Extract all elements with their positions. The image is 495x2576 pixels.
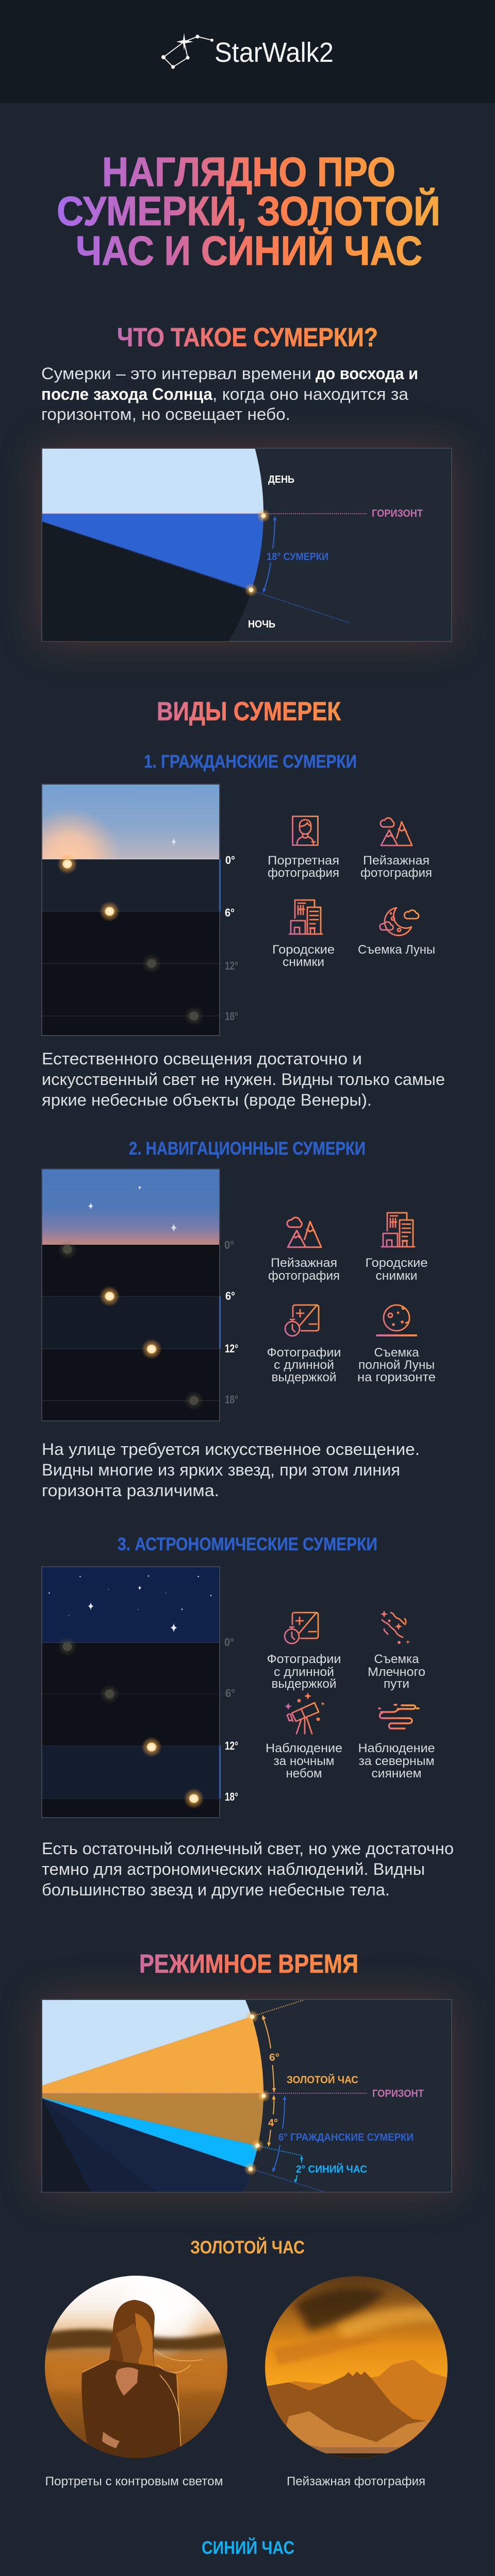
day area bbox=[42, 449, 263, 514]
label: landscape photo bbox=[268, 1256, 340, 1283]
arrow: civil twilight bbox=[272, 2095, 287, 2173]
label: long exposure: с длинной bbox=[274, 1665, 334, 1679]
label: night: НОЧЬ bbox=[248, 619, 275, 630]
title bbox=[57, 149, 440, 274]
panel: astronomical twilight sky scale bbox=[42, 1567, 238, 1818]
wordmark: StarWalk2 bbox=[214, 37, 334, 68]
text block: nautical twilight: Видны многие из ярких звезд, при этом линия bbox=[42, 1461, 400, 1479]
label: moon shots: Съемка Луны bbox=[358, 943, 435, 957]
label: landscape photo: фотография bbox=[360, 866, 432, 880]
label: milky way: Съемка bbox=[374, 1652, 419, 1666]
label: night sky: Наблюдение bbox=[266, 1741, 342, 1755]
icon: city bbox=[289, 900, 322, 934]
panel: nautical twilight sky scale bbox=[42, 1169, 238, 1421]
label: civil twilight: 6° ГРАЖДАНСКИЕ СУМЕРКИ bbox=[278, 2132, 414, 2143]
heading: mode time: РЕЖИМНОЕ ВРЕМЯ bbox=[139, 1949, 358, 1978]
label: day: ДЕНЬ bbox=[268, 474, 294, 485]
label: portrait photo: Портретная bbox=[268, 854, 339, 868]
text block: astronomical twilight: темно для астрономических наблюдений. Видны bbox=[42, 1860, 425, 1878]
label: city shots bbox=[272, 943, 335, 969]
label: long exposure bbox=[267, 1346, 341, 1384]
text block: nautical twilight: горизонта различима. bbox=[42, 1481, 219, 1500]
title: НАГЛЯДНО ПРО bbox=[102, 149, 395, 195]
logo: StarWalk2 bbox=[161, 33, 334, 69]
label: aurora: сиянием bbox=[371, 1767, 422, 1781]
label: long exposure: выдержкой bbox=[271, 1677, 336, 1691]
active scale marker bbox=[219, 1296, 221, 1349]
sun path bbox=[57, 854, 204, 1026]
active scale marker bbox=[219, 859, 221, 911]
active band bbox=[42, 1745, 219, 1799]
text block: twilight definition bbox=[41, 364, 418, 423]
text block: nautical twilight bbox=[42, 1440, 420, 1500]
degree labels: 0° bbox=[224, 1636, 234, 1649]
text block: twilight definition: горизонтом, но освещает небо. bbox=[41, 405, 290, 423]
label: night sky bbox=[266, 1741, 342, 1781]
label: long exposure: Фотографии bbox=[267, 1652, 341, 1666]
label: milky way bbox=[368, 1652, 425, 1691]
uses: civil twilight bbox=[268, 816, 435, 969]
degree labels: 12° bbox=[225, 959, 238, 972]
heading: types of twilight: ВИДЫ СУМЕРЕК bbox=[157, 697, 341, 726]
degree labels: 18° bbox=[225, 1790, 238, 1803]
stars bbox=[88, 1185, 177, 1232]
label: landscape photo: Пейзажная bbox=[271, 1256, 337, 1270]
icon: constellation bbox=[161, 33, 213, 69]
text block: astronomical twilight: большинство звезд и другие небесные тела. bbox=[42, 1880, 390, 1899]
label: blue hour: 2° СИНИЙ ЧАС bbox=[296, 2163, 367, 2175]
label: 6 degrees: 6° bbox=[269, 2052, 279, 2063]
icon: portrait bbox=[293, 816, 318, 845]
label: long exposure: с длинной bbox=[274, 1358, 334, 1372]
label: aurora: за северным bbox=[359, 1754, 434, 1768]
icon: full moon bbox=[377, 1305, 416, 1335]
degree labels: 12° bbox=[225, 1739, 238, 1752]
heading: golden hour: ЗОЛОТОЙ ЧАС bbox=[190, 2237, 305, 2258]
label: aurora bbox=[358, 1741, 435, 1781]
degree labels bbox=[225, 854, 238, 1023]
degree labels: 18° bbox=[225, 1010, 238, 1023]
icon: mountains bbox=[287, 1217, 321, 1247]
night area bbox=[42, 521, 252, 641]
sun positions bbox=[244, 509, 270, 597]
degree labels: 18° bbox=[225, 1393, 238, 1406]
text block: astronomical twilight: Есть остаточный солнечный свет, но уже достаточно bbox=[42, 1839, 454, 1858]
degree labels bbox=[224, 1239, 238, 1406]
blue hour band bbox=[42, 2098, 258, 2169]
degree labels: 6° bbox=[225, 1290, 235, 1302]
text block: civil twilight: искусственный свет не нужен. Видны только самые bbox=[42, 1070, 445, 1089]
label: full moon: полной Луны bbox=[358, 1358, 435, 1372]
twilight wedge bbox=[42, 514, 263, 590]
label: landscape photo bbox=[360, 854, 432, 880]
degree labels: 6° bbox=[225, 1687, 235, 1700]
text block: twilight definition: , когда оно находится за bbox=[212, 385, 408, 403]
day area bbox=[42, 2000, 252, 2086]
uses: astronomical twilight bbox=[266, 1611, 435, 1781]
golden hour below horizon bbox=[42, 2093, 263, 2146]
heading: nautical twilight: 2. НАВИГАЦИОННЫЕ СУМЕРКИ bbox=[129, 1139, 366, 1159]
label: city shots: снимки bbox=[375, 1269, 418, 1283]
label: milky way: Млечного bbox=[368, 1665, 425, 1679]
icon: long exposure bbox=[285, 1613, 318, 1643]
arrow: 18 degrees bbox=[263, 516, 276, 593]
night fan bbox=[42, 2098, 252, 2192]
icon: aurora bbox=[379, 1705, 419, 1728]
text block: twilight definition: Сумерки – это интервал времени bbox=[41, 364, 311, 383]
degree labels: 0° bbox=[224, 1239, 234, 1251]
icon: mountains bbox=[381, 818, 412, 845]
label: city shots: снимки bbox=[283, 955, 324, 969]
label: long exposure: Фотографии bbox=[267, 1346, 341, 1360]
degree labels: 0° bbox=[225, 854, 235, 867]
label: horizon: ГОРИЗОНТ bbox=[372, 508, 423, 519]
sky bbox=[42, 1170, 219, 1245]
label: city shots: Городские bbox=[272, 943, 335, 957]
text block: nautical twilight: На улице требуется искусственное освещение. bbox=[42, 1440, 420, 1459]
icon: milky way bbox=[381, 1611, 410, 1644]
sky bbox=[42, 785, 219, 859]
label: city shots: Городские bbox=[365, 1256, 428, 1270]
horizon line bbox=[42, 513, 368, 514]
heading: civil twilight: 1. ГРАЖДАНСКИЕ СУМЕРКИ bbox=[144, 752, 357, 772]
label: full moon bbox=[357, 1346, 436, 1384]
degree labels: 6° bbox=[225, 906, 235, 919]
label: long exposure: выдержкой bbox=[271, 1370, 336, 1384]
icon: telescope bbox=[285, 1692, 325, 1734]
active band bbox=[42, 859, 219, 911]
degree labels bbox=[224, 1636, 238, 1803]
title: СУМЕРКИ, ЗОЛОТОЙ bbox=[57, 188, 440, 234]
degree labels: 12° bbox=[225, 1342, 238, 1355]
label: golden hour: ЗОЛОТОЙ ЧАС bbox=[287, 2073, 358, 2086]
text block: civil twilight: Естественного освещения достаточно и bbox=[42, 1049, 362, 1068]
text block: twilight definition: до восхода и bbox=[316, 364, 418, 383]
dotted sun lines bbox=[42, 2000, 368, 2192]
label: horizon: ГОРИЗОНТ bbox=[372, 2088, 424, 2099]
caption: landscape photo: Пейзажная фотография bbox=[287, 2475, 425, 2488]
uses: nautical twilight bbox=[267, 1213, 436, 1384]
label: portrait photo: фотография bbox=[268, 866, 339, 880]
label: portrait photo bbox=[268, 854, 339, 880]
icon: crescent moon bbox=[380, 908, 419, 936]
text block: twilight definition: после захода Солнца bbox=[41, 385, 212, 403]
heading: astronomical twilight: 3. АСТРОНОМИЧЕСКИЕ СУМЕРКИ bbox=[118, 1534, 377, 1554]
panel: twilight diagram bbox=[41, 448, 452, 642]
heading: blue hour: СИНИЙ ЧАС bbox=[202, 2537, 294, 2558]
sky bbox=[42, 1567, 219, 1642]
caption: backlit portraits: Портреты с контровым светом bbox=[45, 2475, 223, 2488]
label: milky way: пути bbox=[384, 1677, 409, 1691]
heading: what is twilight: ЧТО ТАКОЕ СУМЕРКИ? bbox=[117, 323, 378, 352]
arrows: golden hour bbox=[262, 2015, 276, 2147]
twilight limit line bbox=[42, 521, 350, 623]
label: landscape photo: фотография bbox=[268, 1269, 340, 1283]
label: aurora: Наблюдение bbox=[358, 1741, 435, 1755]
sun path bbox=[58, 1240, 204, 1411]
photo: backlit portrait bbox=[45, 2276, 228, 2459]
arrows: blue hour bbox=[294, 2156, 303, 2183]
icon: long exposure bbox=[285, 1305, 319, 1336]
panel: golden and blue hour diagram bbox=[41, 1999, 452, 2193]
title: ЧАС И СИНИЙ ЧАС bbox=[76, 227, 422, 274]
sun path bbox=[58, 1637, 204, 1809]
label: long exposure bbox=[267, 1652, 341, 1691]
photo: golden mountains bbox=[265, 2276, 448, 2459]
label: 18 degree twilight: 18° СУМЕРКИ bbox=[267, 551, 328, 563]
text block: civil twilight: яркие небесные объекты (вроде Венеры). bbox=[42, 1091, 372, 1109]
label: full moon: Съемка bbox=[374, 1346, 419, 1360]
label: 4 degrees: 4° bbox=[268, 2117, 278, 2129]
header band bbox=[0, 0, 495, 103]
label: night sky: за ночным bbox=[273, 1754, 334, 1768]
text block: astronomical twilight bbox=[42, 1839, 454, 1899]
label: night sky: небом bbox=[286, 1767, 322, 1781]
active scale marker bbox=[219, 1745, 221, 1799]
icon: city bbox=[382, 1213, 415, 1247]
stars bbox=[48, 1575, 211, 1633]
active band bbox=[42, 1296, 219, 1349]
golden hour above horizon bbox=[42, 2016, 263, 2093]
label: city shots bbox=[365, 1256, 428, 1283]
text block: civil twilight bbox=[42, 1049, 445, 1109]
label: landscape photo: Пейзажная bbox=[363, 854, 430, 868]
label: full moon: на горизонте bbox=[357, 1370, 436, 1384]
panel: civil twilight sky scale bbox=[42, 784, 238, 1036]
star: Venus bbox=[171, 838, 177, 846]
sun positions bbox=[244, 2010, 270, 2176]
